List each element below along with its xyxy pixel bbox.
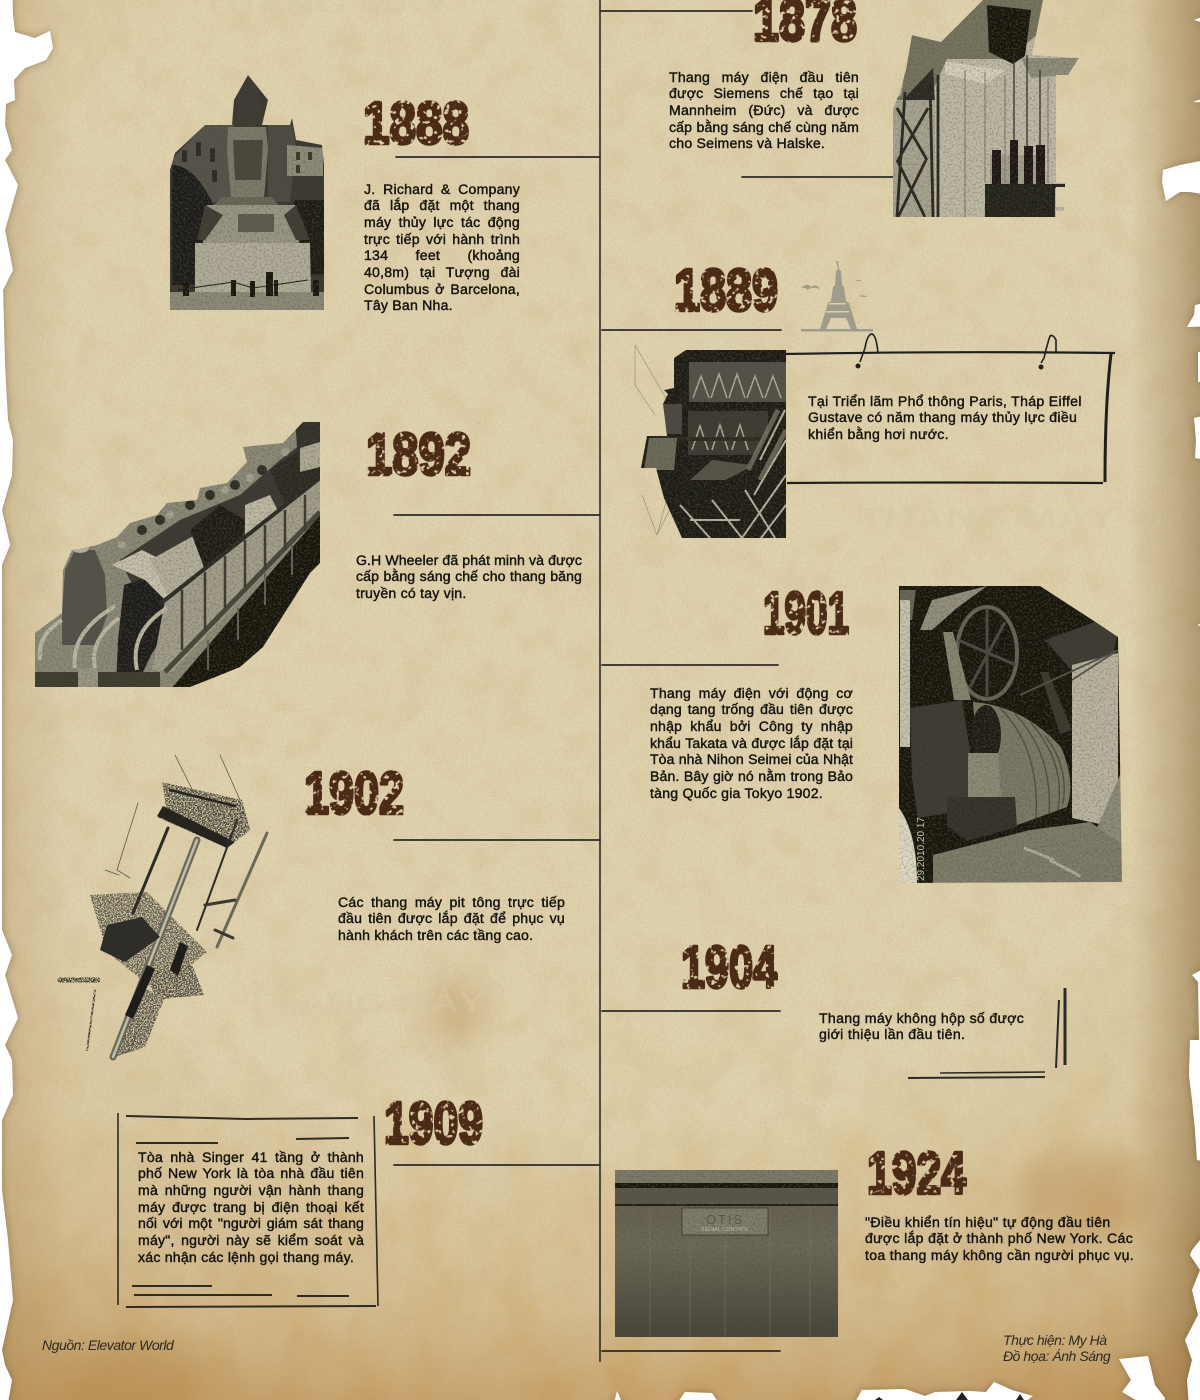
- text 1902: [338, 894, 565, 946]
- photo: Columbus monument: [170, 75, 324, 310]
- text 1892: [356, 552, 582, 604]
- text 1901: Tòa nhà Nihon Seimei của Nhật: [650, 751, 853, 767]
- photo: Eiffel tower lift: [635, 345, 788, 540]
- text 1888: 40,8m) tại Tượng đài: [364, 264, 520, 280]
- year 1909: 1909: [384, 1090, 483, 1156]
- text 1904: giới thiệu lần đầu tiên.: [819, 1026, 965, 1042]
- panel: 1924: [602, 1140, 1140, 1351]
- connector 1878 top: [600, 10, 752, 12]
- text 1902: đầu tiên được lắp đặt để phục vụ: [338, 910, 565, 926]
- panel: 1878: [600, 0, 1085, 220]
- text 1878: cho Seimens và Halske.: [669, 135, 825, 151]
- connector 1892: [394, 514, 600, 516]
- watermark: magazine logos: THANG MÁY: [858, 501, 1116, 535]
- text 1878: được Siemens chế tạo tại: [669, 85, 859, 101]
- year 1901: 1901: [763, 580, 849, 646]
- text 1878: Thang máy điện đầu tiên: [669, 68, 859, 84]
- panel: 1909: [118, 1090, 600, 1307]
- text 1889: Tại Triển lãm Phổ thông Paris, Tháp Eiffel: [808, 392, 1082, 408]
- author credits: [1003, 1332, 1111, 1364]
- photo: escalator with passengers: [30, 415, 325, 690]
- connector 1909: [394, 1164, 600, 1166]
- photo: Siemens electric lift: [890, 0, 1085, 220]
- panel: 1901: [602, 580, 1125, 890]
- text 1909: [138, 1148, 364, 1268]
- text 1889: Gustave có năm thang máy thủy lực điều: [808, 409, 1077, 425]
- text 1878: Mannheim (Đức) và được: [669, 102, 859, 118]
- text 1909: Tòa nhà Singer 41 tầng ở thành: [138, 1148, 364, 1164]
- year 1888: 1888: [363, 90, 469, 156]
- year 1924: 1924: [867, 1140, 966, 1206]
- text 1902: hành khách trên các tầng cao.: [338, 927, 533, 943]
- panel: 1888: [165, 70, 600, 316]
- photo: drum machine: [895, 580, 1125, 890]
- text 1909: xác nhận các lệnh gọi thang máy.: [138, 1249, 354, 1265]
- icon: Eiffel tower: [801, 261, 873, 332]
- bottom edge silhouette marks: [875, 1392, 1024, 1400]
- text 1888: Tây Ban Nha.: [364, 297, 453, 313]
- connector 1888: [396, 156, 600, 158]
- text 1909: nối với một "người giám sát thang: [138, 1215, 364, 1231]
- text 1901: tàng Quốc gia Tokyo 1902.: [650, 785, 823, 801]
- text 1901: dạng tang trống đầu tiên được: [650, 701, 853, 717]
- text 1878: cấp bằng sáng chế cùng năm: [669, 119, 859, 135]
- text 1904: [819, 1010, 1034, 1046]
- timeline axis: [599, 0, 601, 1362]
- text 1892: G.H Wheeler đã phát minh và được: [356, 552, 582, 568]
- text 1901: [650, 684, 853, 804]
- source credit: Nguồn: Elevator World: [42, 1337, 175, 1353]
- connector 1924: [602, 1350, 780, 1352]
- text 1892: cấp bằng sáng chế cho thang băng: [356, 568, 582, 584]
- text 1924: toa thang máy không cần người phục vụ.: [865, 1247, 1134, 1263]
- text 1909: máy", người này sẽ kiểm soát và: [138, 1232, 364, 1248]
- photo: Otis signal control plate: SIGNAL CONTROL: [701, 1227, 749, 1233]
- connector 1889: [602, 329, 781, 331]
- sketch box 1909: [118, 1113, 378, 1307]
- illustration: piston elevator: [60, 755, 267, 1057]
- panel: 1904: [602, 934, 1065, 1078]
- text 1901: nhập khẩu bởi Công ty nhập: [650, 718, 853, 734]
- text 1888: [364, 180, 520, 316]
- note panel 1889: [785, 334, 1115, 483]
- text 1909: máy được trang bị điện thoại kết: [138, 1199, 364, 1215]
- connector 1902: [394, 839, 600, 841]
- panel: 1889: [602, 258, 1115, 540]
- connector 1901: [602, 664, 778, 666]
- text 1888: trực tiếp với hành trình: [364, 231, 520, 247]
- text 1889: [808, 392, 1093, 444]
- year 1902: 1902: [304, 760, 404, 826]
- text 1901: khẩu Takata và được lắp đặt tại: [650, 735, 853, 751]
- bracket marks 1904: [908, 988, 1065, 1078]
- text 1924: "Điều khiển tín hiệu" tự động đầu tiên: [865, 1214, 1111, 1230]
- photo: Otis signal control plate: [615, 1170, 838, 1337]
- text 1901: Thang máy điện với động cơ: [650, 684, 853, 700]
- watermark: magazine logos: THANG MÁY: [245, 987, 485, 1018]
- author credits: Thực hiện: My Hà: [1003, 1332, 1107, 1348]
- year 1892: 1892: [366, 422, 471, 488]
- text 1889: khiển bằng hơi nước.: [808, 426, 949, 442]
- text 1909: mà những người vận hành thang: [138, 1182, 364, 1198]
- text 1888: 134 feet (khoảng: [364, 247, 520, 263]
- author credits: Đồ họa: Ánh Sáng: [1003, 1348, 1111, 1364]
- text 1901: Bản. Bây giờ nó nằm trong Bảo: [650, 768, 853, 784]
- photo: Otis signal control plate: OTIS: [706, 1212, 744, 1227]
- text 1904: Thang máy không hộp số được: [819, 1010, 1024, 1026]
- year 1904: 1904: [681, 934, 777, 1000]
- connector 1878 lower: [742, 176, 900, 178]
- text 1924: được lắp đặt ở thành phố New York. Các: [865, 1230, 1133, 1246]
- text 1888: máy thủy lực tác động: [364, 214, 520, 230]
- year 1889: 1889: [674, 258, 778, 324]
- panel: 1902: [60, 755, 600, 1057]
- text 1902: Các thang máy pit tông trực tiếp: [338, 894, 565, 910]
- connector 1904: [602, 1010, 780, 1012]
- panel: 1892: [30, 415, 600, 690]
- text 1892: truyền có tay vịn.: [356, 585, 466, 601]
- text 1888: Columbus ở Barcelona,: [364, 281, 520, 297]
- text 1888: J. Richard & Company: [364, 180, 520, 196]
- text 1888: đã lắp đặt một thang: [364, 197, 520, 213]
- text 1878: [669, 68, 859, 154]
- text 1909: phố New York là tòa nhà đầu tiên: [138, 1165, 364, 1181]
- text 1924: [865, 1214, 1140, 1266]
- photo: drum machine: 29.2010.20 17: [916, 817, 927, 881]
